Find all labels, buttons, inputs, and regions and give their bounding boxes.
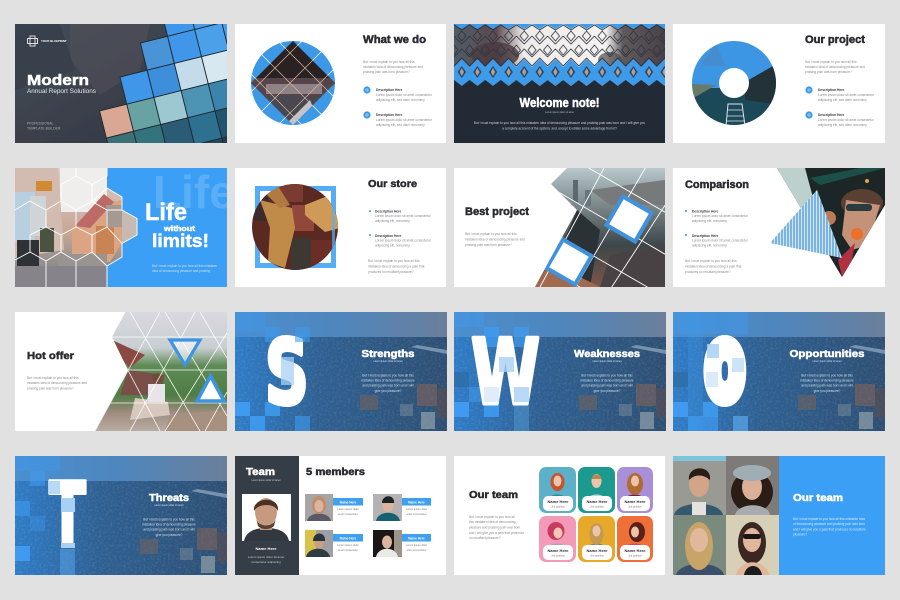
heading: Hot offer	[27, 350, 74, 362]
slide: Threats	[15, 456, 227, 575]
card 2	[578, 467, 615, 513]
body text: But I must explain to you how all this	[368, 259, 420, 263]
card 2: Job position	[590, 504, 604, 508]
subheading: Lorem ipsum dolor sit amet	[593, 360, 622, 363]
slide: Welcome note	[454, 24, 665, 143]
body text: mistaken idea of denouncing pleasure	[361, 378, 415, 382]
card 3: Name Here	[625, 499, 646, 504]
card 5	[578, 516, 615, 562]
body text: But I must explain to you how all this	[685, 259, 737, 263]
dark side panel: Team	[246, 467, 275, 478]
main portrait	[242, 494, 291, 541]
body text: mistaken idea of denouncing pleasure	[580, 378, 634, 382]
dark side panel: Lorem ipsum dolor sit amet	[252, 479, 281, 482]
slide: Our team cards	[454, 456, 665, 575]
travel photo with triangle grid	[95, 312, 227, 431]
bullet item 1	[685, 210, 749, 223]
intro text: mistaken idea of denouncing pleasure and	[805, 65, 865, 69]
body text: mistaken idea of denouncing a pain that	[368, 264, 424, 268]
body text: no resultant pleasure?	[469, 536, 501, 540]
card 1: Job position	[551, 504, 565, 508]
bullet item 1: adipiscing elit, nonummy	[692, 219, 727, 223]
bullet item 1: adipiscing elit, sed diam nonummy	[376, 98, 425, 102]
heading: Threats	[149, 493, 189, 504]
bullet item 2: Lorem ipsum dolor sit amet consectetur	[818, 118, 875, 122]
body text: praising pain was born pleasure?	[465, 243, 512, 247]
member 2: Name Here	[408, 500, 425, 504]
subheading: Lorem ipsum dolor sit amet	[545, 111, 574, 114]
slide: Weaknesses	[454, 312, 666, 431]
bullet item 2: Description Here	[375, 234, 402, 238]
circle image	[251, 41, 335, 125]
logo: YOUR BLUEPRINT	[41, 39, 67, 43]
headline: without	[163, 224, 196, 233]
subheading: Lorem ipsum dolor sit amet	[374, 360, 403, 363]
intro text: praising pain was born pleasure?	[805, 70, 852, 74]
member 2	[373, 494, 431, 521]
body text: But I must explain to you how all this mistaken idea	[793, 517, 865, 521]
heading: Opportunities	[790, 349, 865, 360]
dark side panel: Lorem ipsum dolor sit amet	[248, 555, 284, 559]
body text: and I will give you a pain that produces no resultant	[793, 528, 866, 532]
body text: this mistaken idea of denouncing	[469, 520, 516, 524]
body text: and praising pain was born and I will	[581, 384, 633, 388]
member 2: Lorem ipsum dolor	[406, 507, 427, 511]
card 4	[539, 516, 576, 562]
bullet item 1: adipiscing elit, nonummy	[375, 219, 410, 223]
bullet item 2: adipiscing elit, sed diam nonummy	[818, 123, 867, 127]
bullet item 2	[805, 111, 875, 127]
member 4	[373, 530, 431, 557]
heading: Our team	[469, 489, 518, 501]
donut image	[692, 41, 776, 125]
pixel squares	[673, 312, 748, 431]
slide: Our team photos	[673, 456, 885, 575]
card 3	[617, 467, 653, 513]
faded background word: Life	[153, 166, 235, 218]
body text: mistaken idea of denouncing pleasure	[142, 522, 196, 526]
big letter O: O	[706, 330, 744, 416]
bullet item 2: adipiscing elit, nonummy	[692, 244, 727, 248]
body text: a complete account of the system, and, except to obtain some advantage from it?	[502, 126, 617, 130]
body text: But I must explain to you how all this mistaken	[152, 264, 217, 268]
body text: But I must explain to you how all this	[465, 232, 517, 236]
circle boot photo	[250, 182, 340, 272]
body text: give you pleasure?	[594, 389, 621, 393]
body text: But I must explain to you how all this	[801, 374, 853, 378]
hexagon grid	[15, 168, 137, 287]
body text: and praising pain was born and I will	[143, 528, 195, 532]
headline: Life	[145, 199, 187, 226]
photo 2	[726, 456, 779, 515]
letter tint squares	[706, 344, 744, 387]
member 1	[305, 494, 363, 521]
dark side panel	[235, 456, 299, 575]
intro text: But I must explain to you how all this	[363, 60, 415, 64]
heading: What we do	[363, 34, 426, 46]
slide: Modern cover	[15, 24, 227, 143]
member 1: Lorem ipsum dolor	[337, 507, 359, 511]
tile grid image	[99, 24, 227, 143]
bullet item 2: adipiscing elit, nonummy	[375, 244, 410, 248]
bullet item 1: Description Here	[692, 210, 719, 214]
bullet item 2: Lorem ipsum dolor sit amet consectetur	[692, 238, 749, 242]
card 1	[539, 467, 576, 513]
body text: pleasure?	[793, 532, 807, 536]
card 5: Job position	[590, 554, 604, 558]
subheading: Lorem ipsum dolor sit amet	[813, 360, 842, 363]
body text: produces no resultant pleasure?	[685, 270, 731, 274]
zigzag pattern band	[454, 24, 665, 86]
tagline: PROFESSIONAL	[27, 122, 53, 126]
card 5: Name Here	[587, 548, 608, 553]
street photo	[15, 168, 137, 287]
intro text: mistaken idea of denouncing pleasure and	[363, 65, 423, 69]
body text: and I will give you a pain that produces	[469, 531, 524, 535]
body text: But I must explain to you how all this	[143, 518, 195, 522]
striped triangle	[770, 190, 842, 258]
body text: mistaken idea of denouncing pleasure	[800, 378, 854, 382]
logo	[28, 36, 67, 46]
body text: idea of denouncing pleasure and praising	[152, 269, 211, 273]
member 2: amet consectetur	[407, 512, 427, 516]
body text: But I must explain to you how all this mistaken idea of denouncing pleasure and praising pain was born and I will give you	[474, 121, 645, 125]
blue triangle frame up	[197, 376, 224, 401]
heading: Best project	[465, 206, 529, 218]
card 4: Name Here	[548, 548, 569, 553]
bullet item 2	[363, 111, 433, 127]
subheading: Lorem ipsum dolor sit amet	[155, 504, 184, 507]
member 1: amet consectetur	[338, 512, 358, 516]
photo 4	[726, 515, 779, 575]
bullet item 1	[369, 210, 432, 223]
bullet item 1: Lorem ipsum dolor sit amet consectetur	[375, 214, 432, 218]
blue diamond frame 1	[606, 196, 652, 242]
body text: and praising pain was born and I will	[362, 384, 414, 388]
bullet item 2: Lorem ipsum dolor sit amet consectetur	[376, 118, 433, 122]
body text: give you pleasure?	[375, 389, 402, 393]
tagline: TEMPLATE BUILDER	[27, 126, 61, 130]
body text: give you pleasure?	[814, 389, 841, 393]
body text: But I must explain to you how all this	[362, 374, 414, 378]
blue triangle frame down	[170, 340, 200, 365]
body text: But I must explain to you how all	[469, 515, 515, 519]
member 3	[305, 530, 363, 557]
body text: mistaken idea of denouncing pleasure and	[465, 238, 525, 242]
slide: Hot offer	[15, 312, 228, 431]
slide: Our project	[673, 24, 885, 143]
blue diamond frame 2	[546, 239, 592, 285]
body text: and praising pain was born and I will	[801, 384, 853, 388]
letter tint squares	[281, 334, 305, 385]
intro text: praising pain was born pleasure?	[363, 70, 410, 74]
member 4: Lorem ipsum dolor	[406, 543, 427, 547]
bullet item 2: Lorem ipsum dolor sit amet consectetur	[375, 238, 432, 242]
heading: Our team	[793, 493, 843, 504]
heading: Welcome note!	[520, 96, 600, 110]
dark side panel: Name Here	[256, 546, 277, 551]
bullet item 1: adipiscing elit, sed diam nonummy	[818, 98, 867, 102]
bullet item 1: Lorem ipsum dolor sit amet consectetur	[818, 93, 875, 97]
card 2: Name Here	[587, 499, 608, 504]
body text: praising pain was born pleasure?	[27, 386, 74, 390]
headline	[146, 202, 208, 248]
pixel squares	[454, 312, 529, 431]
member 4: Name Here	[408, 536, 425, 540]
heading: Strengths	[362, 349, 415, 360]
bullet item 2: Description Here	[376, 113, 403, 117]
big letter S: S	[265, 322, 309, 424]
headline: limits!	[152, 230, 209, 251]
title: Modern	[27, 72, 89, 89]
heading: Comparison	[685, 179, 749, 191]
photo 1	[673, 456, 726, 515]
bullet item 2: Description Here	[692, 234, 719, 238]
pixel squares	[235, 312, 310, 431]
member 1: Name Here	[340, 500, 357, 504]
big letter W: W	[471, 320, 540, 426]
pixel squares	[15, 456, 75, 575]
body text: mistaken idea of denouncing pleasure and	[27, 381, 87, 385]
bullet item 1: Lorem ipsum dolor sit amet consectetur	[376, 93, 433, 97]
bullet item 1: Description Here	[818, 88, 845, 92]
slide: Our store	[235, 168, 446, 287]
slide: Team 5 members	[235, 456, 446, 575]
subtitle: Annual Report Solutions	[27, 88, 96, 95]
body text: give you pleasure?	[156, 533, 183, 537]
slide: Life without limits	[15, 166, 235, 287]
bullet item 1	[805, 86, 875, 102]
bullet item 2	[685, 234, 749, 248]
slide: Strengths	[235, 312, 447, 431]
body text: produces no resultant pleasure?	[368, 270, 414, 274]
slide: Opportunities	[673, 312, 885, 431]
card 6: Name Here	[625, 548, 646, 553]
heading: 5 members	[306, 467, 365, 478]
bullet item 1: Description Here	[375, 210, 402, 214]
member 3: Name Here	[340, 536, 357, 540]
member 3: amet consectetur	[338, 548, 358, 552]
portrait photo triangle	[775, 168, 887, 280]
card 4: Job position	[551, 554, 565, 558]
photo 3	[673, 515, 726, 575]
bullet item 2	[369, 234, 432, 248]
letter tint squares	[484, 357, 529, 402]
card 6: Job position	[628, 554, 642, 558]
body text: pleasure and praising pain was born	[469, 526, 520, 530]
heading: Our project	[805, 34, 865, 46]
blue frame	[258, 188, 334, 266]
heading: Weaknesses	[574, 349, 640, 360]
body text: mistaken idea of denouncing a pain that	[685, 264, 741, 268]
slide: Best project	[454, 168, 665, 287]
body text: But I must explain to you how all this	[27, 376, 79, 380]
dark side panel: consectetur adipiscing	[251, 560, 281, 564]
intro text: But I must explain to you how all this	[805, 60, 857, 64]
letter tint squares	[49, 481, 75, 548]
member 3: Lorem ipsum dolor	[337, 543, 359, 547]
big letter T: T	[49, 464, 86, 568]
slide: What we do	[230, 20, 446, 146]
body text: But I must explain to you how all this	[581, 374, 633, 378]
bullet item 2: Description Here	[818, 113, 845, 117]
card 1: Name Here	[548, 499, 569, 504]
body text: of denouncing pleasure and praising pain was born	[793, 522, 865, 526]
card 3: Job position	[628, 504, 642, 508]
heading: Our store	[368, 178, 417, 190]
bullet item 1	[363, 86, 433, 102]
bullet item 2: adipiscing elit, sed diam nonummy	[376, 123, 425, 127]
city photo with grid	[535, 168, 665, 287]
slide: Comparison	[673, 168, 887, 287]
bullet item 1: Description Here	[376, 88, 403, 92]
card 6	[617, 516, 653, 562]
bullet item 1: Lorem ipsum dolor sit amet consectetur	[692, 214, 749, 218]
member 4: amet consectetur	[407, 548, 427, 552]
